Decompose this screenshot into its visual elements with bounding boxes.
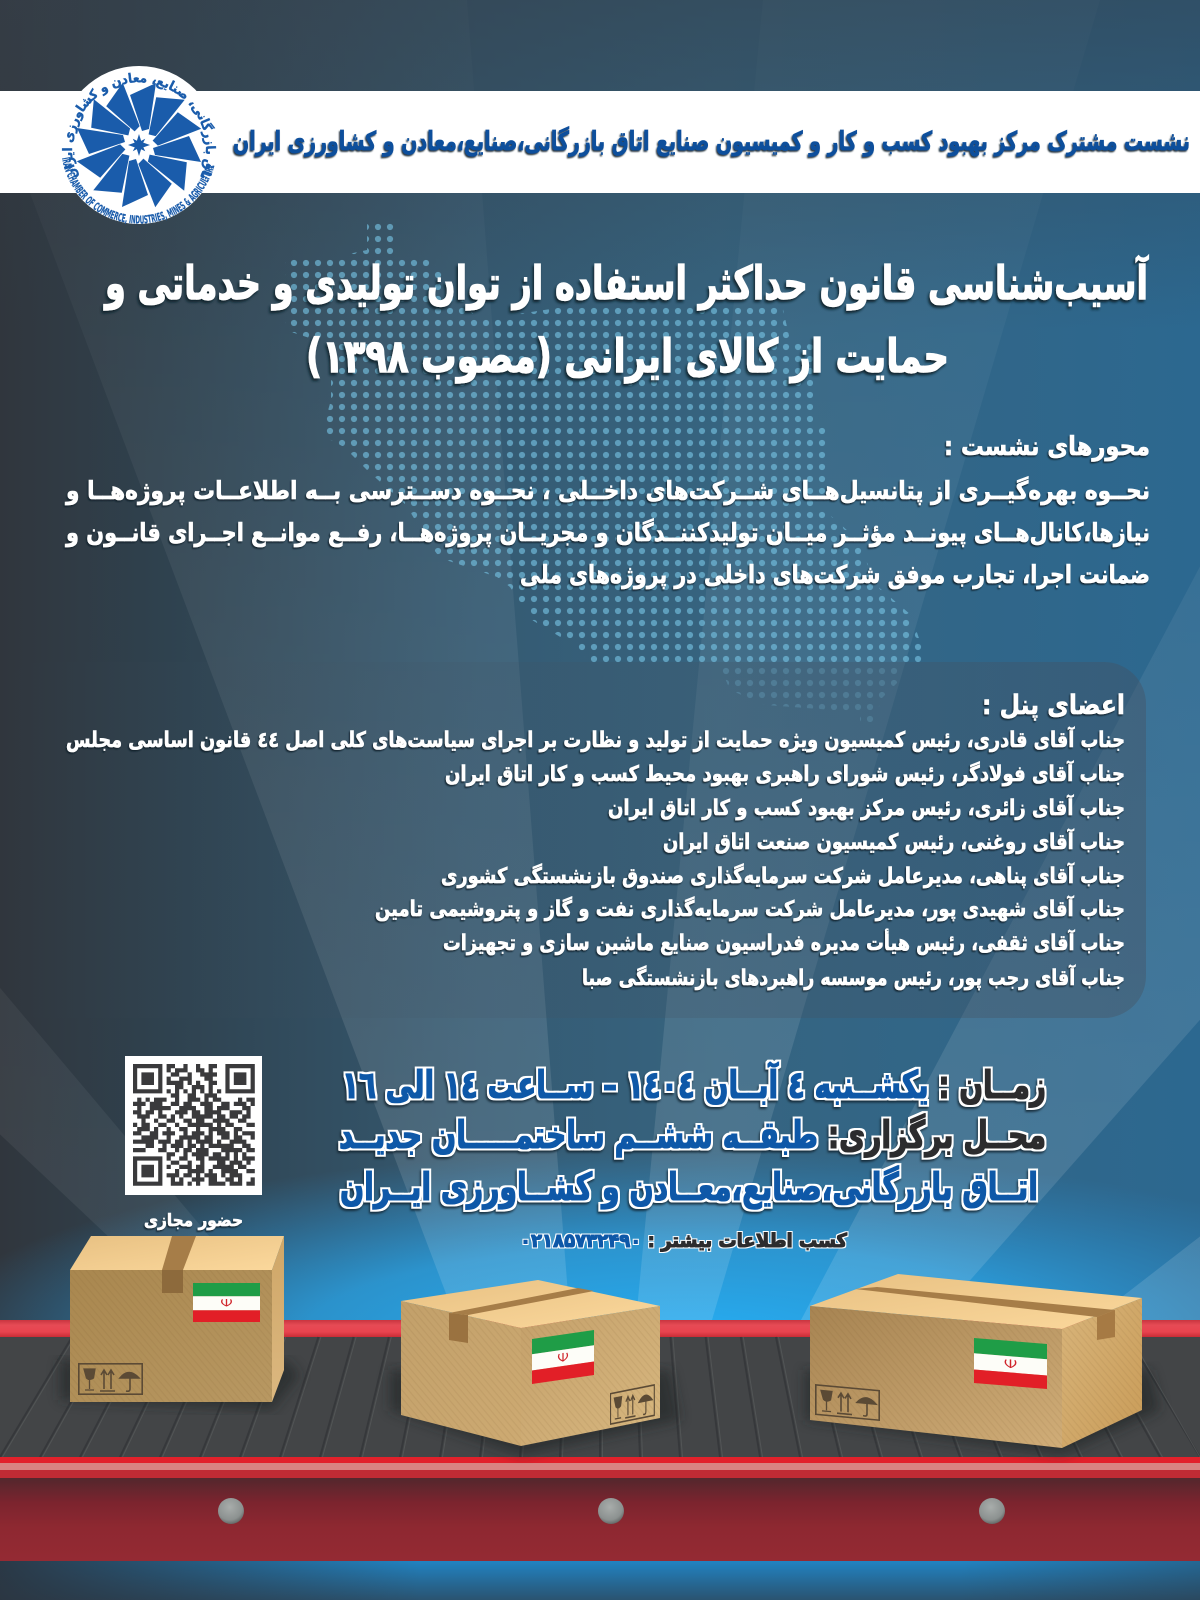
event details xyxy=(339,1061,1046,1210)
panel heading: اعضای پنل : xyxy=(982,690,1125,721)
panel members list xyxy=(66,726,1125,991)
session topics xyxy=(64,432,1150,590)
panel: panel members xyxy=(0,662,1146,1018)
box: middle cardboard box xyxy=(390,1280,680,1455)
QR code xyxy=(125,1056,262,1195)
Iranian flag label xyxy=(193,1283,260,1322)
contact line: کسب اطلاعات بیشتر : ۰۲۱۸۵۷۳۲۴۹۰ xyxy=(520,1230,848,1252)
main title xyxy=(104,255,1149,383)
packing tape xyxy=(449,1288,594,1343)
topics paragraph xyxy=(64,476,1150,590)
topics heading: محورهای نشست : xyxy=(944,432,1150,462)
Iranian flag label xyxy=(532,1330,594,1384)
conveyor belt xyxy=(0,1320,1200,1600)
time: زمــان : یکشــنبه ٤ آبــان ١٤٠٤ – ســاعت ١٤ الی ١٦ xyxy=(342,1061,1046,1107)
venue: محــل برگزاری: طبقــه ششــم ساختمـــــان جدیــد xyxy=(339,1113,1046,1158)
virtual attendance label: حضور مجازی xyxy=(144,1211,243,1231)
handling marks xyxy=(79,1364,142,1394)
upper rail xyxy=(0,1320,1200,1337)
box: right cardboard box xyxy=(805,1274,1160,1455)
logo: Iran Chamber of Commerce xyxy=(62,66,216,224)
box: left cardboard box xyxy=(60,1236,300,1410)
top white band xyxy=(0,91,1200,193)
dotted map of Iran xyxy=(280,215,930,724)
packing tape xyxy=(162,1236,196,1293)
logo: Iran Chamber of Commerce: IRAN CHAMBER OF COMMERCE, INDUSTRIES, MINES & AGRICULTURE xyxy=(62,157,214,224)
handling marks xyxy=(816,1385,879,1420)
main title: حمایت از کالای ایرانی (مصوب ۱۳۹۸) xyxy=(306,329,949,383)
lower rail and apron xyxy=(0,1457,1200,1561)
Iranian flag label xyxy=(974,1338,1047,1389)
rivets xyxy=(218,1498,1005,1524)
belt surface xyxy=(0,1337,1200,1457)
bottom strip xyxy=(0,1561,1200,1600)
packing tape xyxy=(855,1287,1115,1340)
handling marks xyxy=(611,1385,654,1424)
